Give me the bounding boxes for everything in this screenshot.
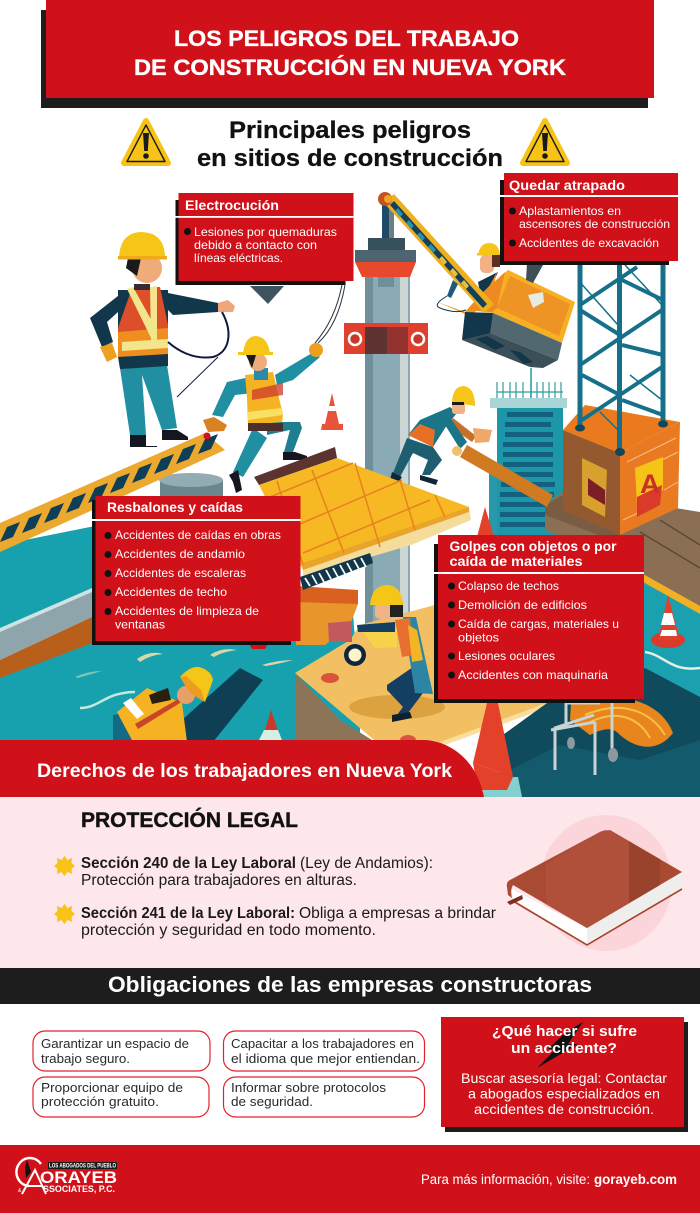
bullet list: Accidentes de limpieza de — [115, 604, 259, 618]
bullet list: Demolición de edificios — [458, 598, 587, 612]
traffic cone right — [651, 595, 685, 648]
roof panel — [254, 447, 471, 577]
text: sección 240 — [81, 855, 433, 889]
icon: book — [507, 815, 682, 951]
bullet text: líneas eléctricas. — [194, 251, 283, 265]
callout title: Golpes con objetos o por — [450, 538, 617, 554]
section banner: derechos de los trabajadores: Derechos de los trabajadores en Nueva York — [37, 760, 452, 782]
callout body: Buscar asesoría legal: Contactar — [461, 1070, 667, 1086]
worker: crouching with tablet — [113, 667, 263, 742]
power cables and diamond sign — [250, 285, 345, 343]
bullet list: Accidentes de caídas en obras — [115, 528, 281, 542]
footer link text — [421, 1172, 677, 1187]
card: protocolos de seguridad: de seguridad. — [231, 1094, 313, 1109]
crane boom — [378, 192, 494, 313]
section banner: obligaciones — [0, 968, 700, 1004]
traffic cone bottom left — [259, 710, 282, 740]
footer link text: gorayeb.com — [594, 1172, 677, 1187]
text: sección 241: Obliga a empresas a brindar — [299, 905, 496, 922]
worker: crane operator — [437, 243, 501, 316]
central column — [355, 204, 416, 627]
right water and dark ground — [500, 574, 700, 797]
orange crate — [545, 405, 680, 543]
bullet list: Lesiones oculares — [458, 649, 555, 663]
text: sección 241 — [81, 905, 496, 939]
worker: climbing — [203, 336, 323, 493]
bullet list — [104, 528, 281, 632]
water ripples — [75, 649, 293, 708]
section banner: obligaciones: Obligaciones de las empresas constructoras — [108, 972, 592, 997]
bullet list: Caída de cargas, materiales u — [458, 617, 619, 631]
callout title: Resbalones y caídas — [107, 499, 243, 515]
text: sección 240: Protección para trabajadores en alturas. — [81, 872, 357, 889]
section heading: principales peligros: en sitios de construcción — [197, 145, 503, 172]
text: sección 240: Sección 240 de la Ley Laboral — [81, 855, 296, 872]
callout heading — [492, 1023, 637, 1057]
construction site illustration — [0, 192, 700, 797]
icon: warning triangle left — [124, 121, 168, 163]
bullet list: ventanas — [115, 618, 165, 632]
logo: gorayeb — [16, 1158, 117, 1195]
callout: qué hacer si sufre un accidente — [441, 1017, 688, 1132]
machinery cart with orange bundle — [551, 697, 673, 775]
bullet text: Lesiones por quemaduras — [194, 225, 337, 239]
skyscraper — [489, 368, 567, 535]
orange crate: A — [640, 469, 660, 499]
worker: hard hat standing with cable — [90, 232, 235, 447]
callout: resbalones y caídas — [92, 496, 300, 645]
callout: quedar atrapado — [500, 173, 678, 265]
logo: gorayeb: ORAYEB — [40, 1168, 117, 1187]
callout title: Quedar atrapado — [509, 177, 625, 193]
callout body: a abogados especializados en — [468, 1086, 660, 1102]
callout title — [450, 538, 617, 569]
bullet list: objetos — [458, 630, 499, 644]
callout title: caída de materiales — [450, 553, 583, 569]
grey drum — [159, 473, 223, 510]
bullet text — [184, 225, 337, 265]
bullet: aplastamientos: ascensores de construcción — [519, 217, 670, 231]
callout heading: un accidente? — [511, 1040, 617, 1057]
callout: golpes con objetos — [434, 535, 644, 703]
title banner: DE CONSTRUCCIÓN EN NUEVA YORK — [134, 55, 566, 80]
steel truss — [300, 553, 373, 590]
bullet list: Colapso de techos — [458, 579, 559, 593]
bullet text: debido a contacto con — [194, 238, 317, 252]
bullet list — [448, 579, 619, 682]
card: capacitar: Capacitar a los trabajadores en — [231, 1036, 414, 1051]
footer link text: Para más información, visite: — [421, 1172, 590, 1187]
traffic cone small — [321, 393, 343, 430]
card: equipo de protección — [33, 1077, 209, 1117]
title banner: LOS PELIGROS DEL TRABAJO — [174, 26, 519, 51]
card: protocolos de seguridad: Informar sobre protocolos — [231, 1080, 387, 1095]
card: espacio de trabajo seguro: Garantizar un espacio de — [41, 1036, 189, 1051]
big traffic cone — [473, 507, 522, 797]
text: sección 240: (Ley de Andamios): — [300, 855, 433, 872]
text: sección 241: Sección 241 de la Ley Laboral: — [81, 905, 295, 922]
logo: gorayeb: & — [18, 1188, 22, 1194]
hazard striped barrier — [0, 432, 225, 552]
callout body — [461, 1070, 667, 1117]
ground: left water and ramp — [0, 525, 360, 740]
heading: protección legal: PROTECCIÓN LEGAL — [81, 808, 298, 832]
panel: protección legal — [0, 797, 700, 968]
bullet list: Accidentes de andamio — [115, 547, 245, 561]
footer — [0, 1145, 700, 1213]
logo: gorayeb: LOS ABOGADOS DEL PUEBLO — [49, 1164, 116, 1170]
section heading: principales peligros: Principales peligros — [229, 117, 471, 144]
bullet: excavación: Accidentes de excavación — [519, 236, 659, 250]
sand platform — [295, 605, 547, 745]
callout: electrocución — [176, 193, 354, 285]
icon: star 1 — [54, 856, 75, 876]
brown wood platform — [545, 490, 700, 608]
callout heading: ¿Qué hacer si sufre — [492, 1023, 637, 1040]
card: capacitar — [224, 1031, 424, 1071]
card: protocolos de seguridad — [224, 1077, 424, 1117]
bullet list: Accidentes de escaleras — [115, 566, 246, 580]
worker: kneeling with tape — [328, 585, 433, 722]
callout body: accidentes de construcción. — [474, 1101, 654, 1117]
bullet: aplastamientos — [509, 204, 670, 231]
bullet list: Accidentes de techo — [115, 585, 227, 599]
callout title: Electrocución — [185, 197, 279, 213]
text: sección 241: protección y seguridad en todo momento. — [81, 922, 376, 939]
section heading: principales peligros — [197, 117, 503, 172]
title banner — [41, 0, 654, 108]
card: capacitar: el idioma que mejor entiendan. — [231, 1051, 420, 1066]
blue steel tower — [575, 265, 668, 456]
logo: gorayeb: SSOCIATES, P.C. — [43, 1184, 115, 1195]
card: equipo de protección: protección gratuito. — [41, 1094, 159, 1109]
card: equipo de protección: Proporcionar equipo de — [41, 1080, 183, 1095]
icon: star 2 — [54, 904, 75, 924]
crane cab machine — [462, 263, 575, 368]
icon: lightning bolt — [537, 1022, 583, 1068]
bullet: aplastamientos: Aplastamientos en — [519, 204, 621, 218]
card: espacio de trabajo seguro — [33, 1031, 210, 1071]
worker: pushing beam — [390, 386, 553, 507]
section banner: derechos de los trabajadores — [0, 740, 484, 797]
card: espacio de trabajo seguro: trabajo seguro. — [41, 1051, 130, 1066]
bullet list: Accidentes con maquinaria — [458, 668, 608, 682]
icon: warning triangle right — [523, 121, 567, 163]
red column clamp — [344, 323, 428, 354]
